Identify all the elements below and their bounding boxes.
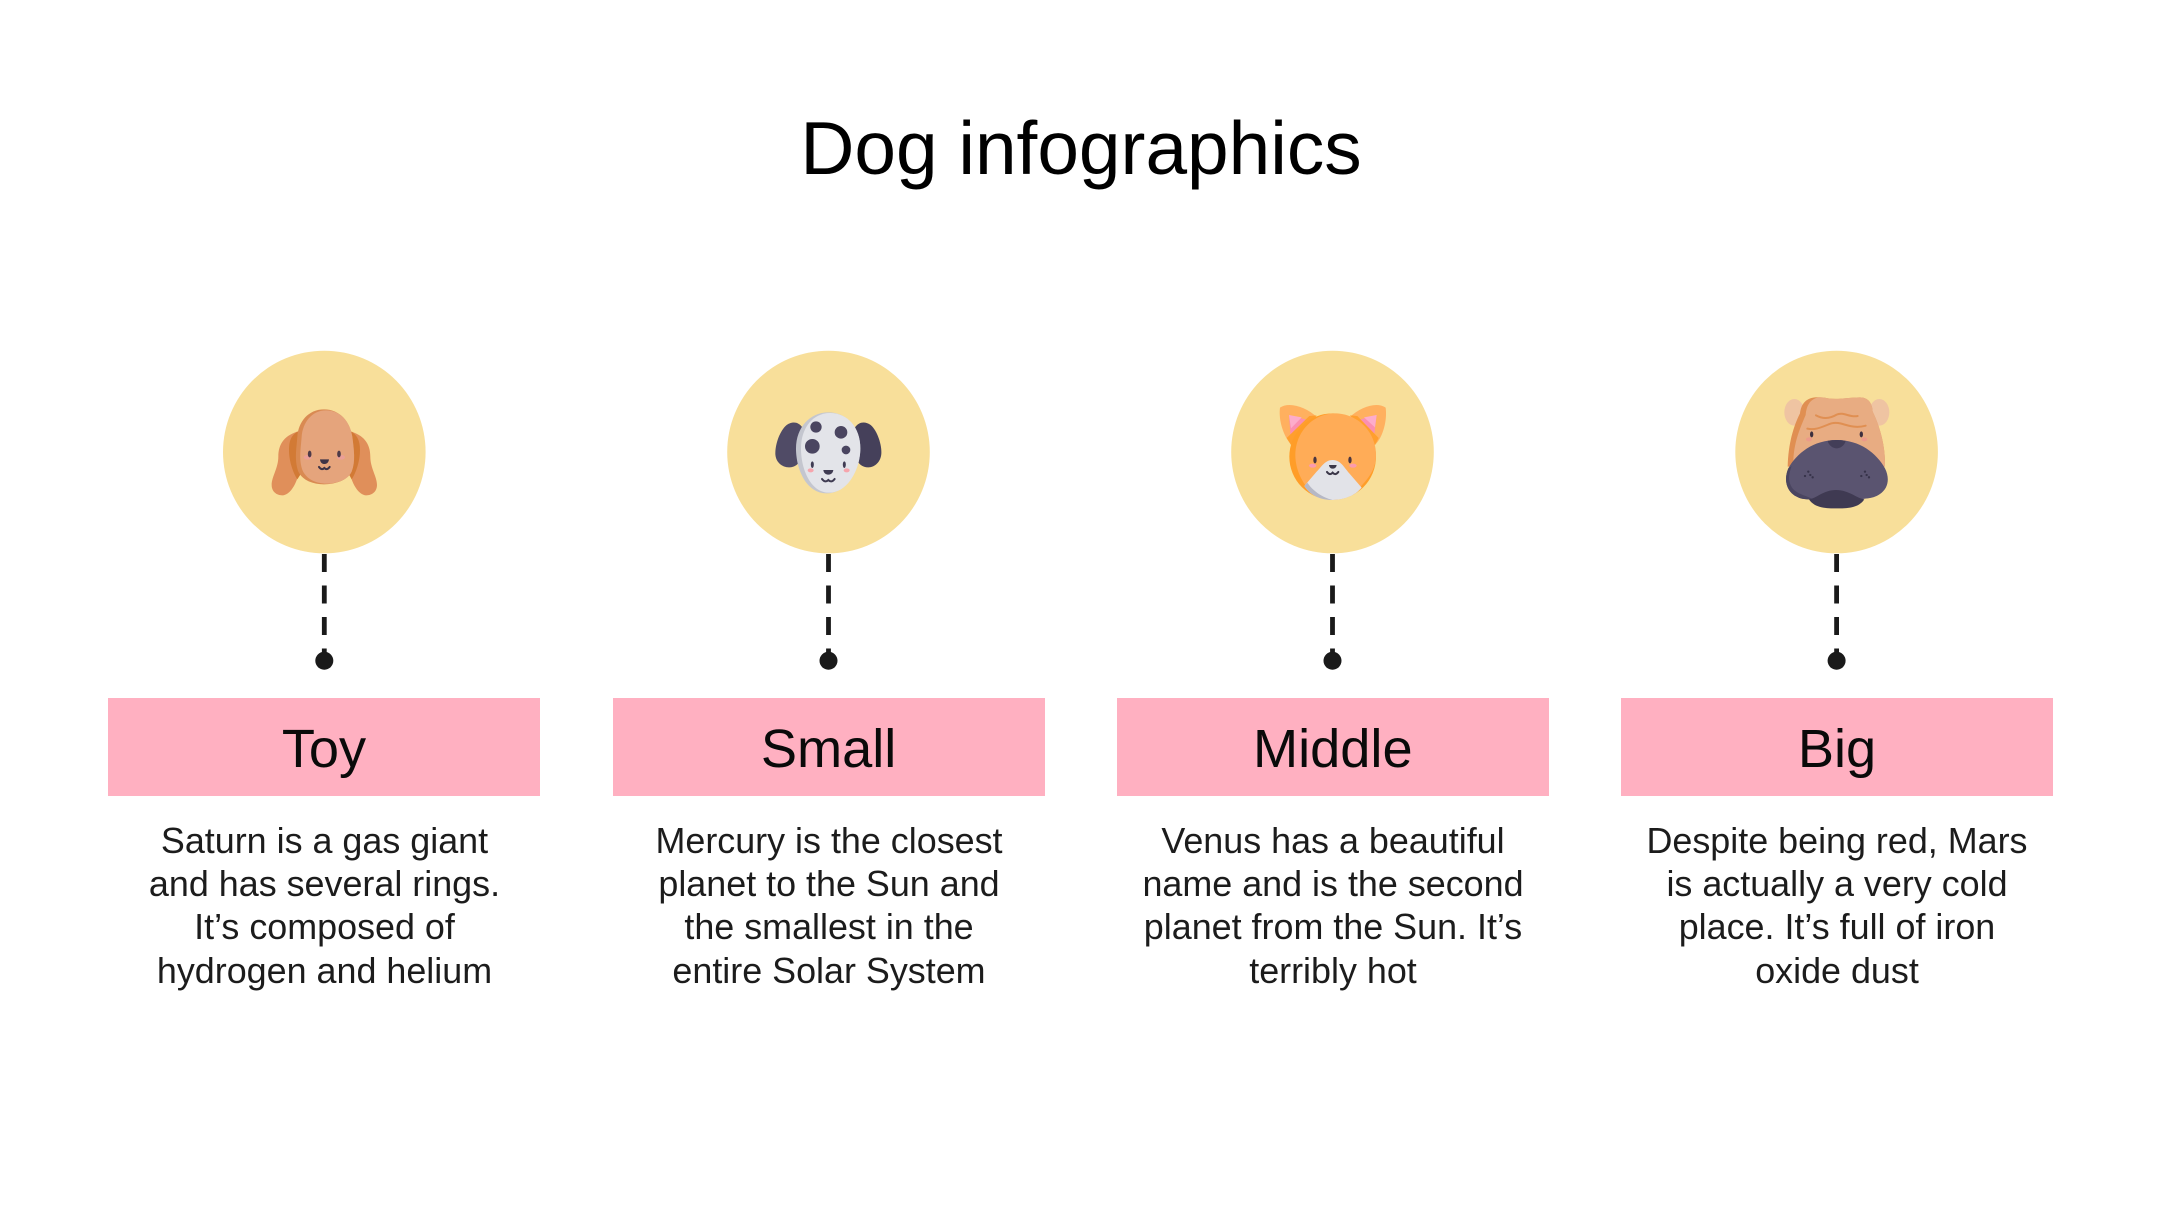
text: Small description: Mercury is the closest: [655, 821, 1003, 861]
text: Small description: the smallest in the: [684, 907, 974, 947]
column 2 circle and dalmatian icon: [727, 351, 930, 670]
label: Small: Small: [761, 719, 896, 779]
text: Small description: planet to the Sun and: [658, 864, 1000, 904]
text: Big description: place. It’s full of iron: [1679, 907, 1995, 947]
text: Toy description: Saturn is a gas giant: [161, 821, 488, 861]
text: Small description: entire Solar System: [672, 951, 986, 991]
text: Middle description: Venus has a beautiful: [1161, 821, 1505, 861]
text: Small description: [655, 821, 1003, 991]
column 4 circle and big dog icon: [1735, 351, 1938, 670]
text: Middle description: name and is the second: [1142, 864, 1524, 904]
text: Middle description: terribly hot: [1249, 951, 1417, 991]
text: Middle description: planet from the Sun. It’s: [1144, 907, 1522, 947]
label: Toy: Toy: [282, 719, 366, 779]
label: Big: Big: [1798, 719, 1876, 779]
label: Toy: [108, 698, 540, 796]
label: Middle: Middle: [1253, 719, 1413, 779]
text: Big description: [1646, 821, 2028, 991]
label: Middle: [1117, 698, 1549, 796]
text: Toy description: [149, 821, 500, 991]
column 1 circle and toy dog icon: [223, 351, 426, 670]
text: Toy description: and has several rings.: [149, 864, 500, 904]
text: Big description: oxide dust: [1755, 951, 1919, 991]
label: Small: [613, 698, 1045, 796]
text: Middle description: [1142, 821, 1524, 991]
text: Big description: Despite being red, Mars: [1646, 821, 2028, 861]
column 3 circle and fox-like dog icon: [1231, 351, 1434, 670]
title: Dog infographics: [800, 106, 1362, 190]
text: Big description: is actually a very cold: [1666, 864, 2008, 904]
text: Toy description: It’s composed of: [194, 907, 455, 947]
label: Big: [1621, 698, 2053, 796]
text: Toy description: hydrogen and helium: [157, 951, 492, 991]
